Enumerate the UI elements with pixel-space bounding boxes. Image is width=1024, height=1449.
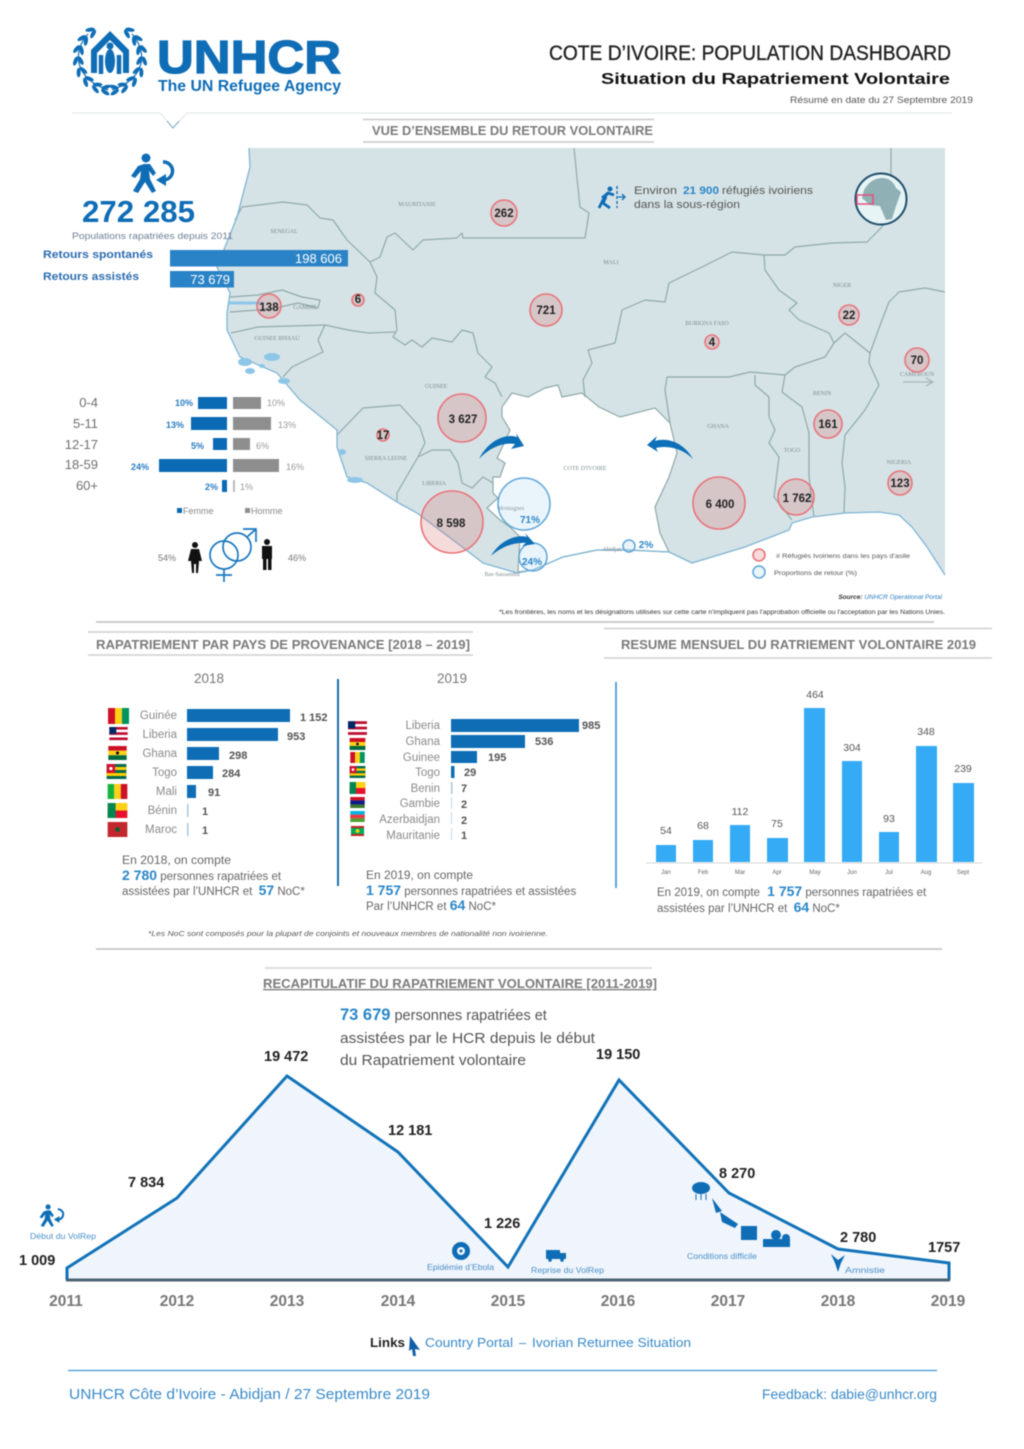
chart: returns by country 2019: Guinee (403, 752, 440, 764)
section heading: vue d'ensemble (363, 120, 654, 142)
bar: spontaneous returns (170, 250, 348, 266)
year labels: 2017 (711, 1293, 745, 1310)
text: cumulative assisted returns: 73 679 personnes rapatriées et (340, 1006, 547, 1024)
chart: age pyramid: 12-17 (65, 437, 98, 452)
text: 2018 summary (122, 855, 305, 898)
chart: returns by country 2018: Guinée (140, 710, 177, 722)
flags (107, 708, 129, 837)
country labels (254, 202, 935, 578)
chart: monthly returns 2019: Aug (921, 870, 931, 876)
text: monthly summary (657, 883, 927, 915)
panel: sex ratio: 54% (158, 553, 176, 563)
year label: 2018 (194, 671, 224, 686)
text: cumulative assisted returns: du Rapatriement volontaire (340, 1053, 526, 1069)
value labels: 1 226 (484, 1216, 520, 1232)
return proportion circles: 24% (522, 557, 542, 568)
value labels: 8 270 (719, 1166, 755, 1182)
bar: assisted returns (170, 271, 234, 288)
flags (348, 721, 367, 836)
returnee circles: 721 (536, 305, 556, 317)
chart: monthly returns 2019: Jan (661, 870, 671, 876)
chart: monthly returns 2019: Feb (698, 870, 709, 876)
chart: monthly returns 2019: Apr (772, 870, 782, 876)
icon: locator globe (856, 174, 906, 224)
map source: Source: UNHCR Operational Portal (838, 594, 943, 601)
text: monthly summary: assistées par l’UNHCR et 64 NoC* (657, 899, 840, 915)
country labels: GUINEE BISSAU (254, 336, 300, 342)
chart: returns by country 2018: Ghana (142, 748, 178, 760)
value labels (19, 1047, 960, 1269)
country labels: GHANA (707, 424, 729, 430)
chart: monthly returns 2019 (646, 689, 982, 876)
panel: total returns (43, 154, 348, 288)
label: assisted returns: Retours assistés (43, 271, 139, 283)
map legend (753, 549, 911, 578)
chart: returns by country 2019: 7 (461, 783, 467, 795)
text: cumulative assisted returns: assistées par le HCR depuis le début (340, 1031, 595, 1047)
title block (549, 42, 973, 105)
country labels: MAURITANIE (398, 202, 436, 208)
section heading: resume mensuel (604, 628, 992, 658)
legend: sex (177, 506, 283, 516)
value labels: 1 009 (19, 1253, 55, 1269)
footnote: NoC: *Les NoC sont composés pour la plupart de conjoints et nouveaux membres de nationalité non ivoirienne. (148, 929, 548, 938)
chart: age pyramid: 10% (175, 398, 193, 408)
returnee circles: 4 (709, 337, 716, 349)
returnee circles (257, 200, 929, 553)
icon: man (262, 539, 272, 570)
year labels: 2019 (931, 1293, 966, 1310)
section heading: recapitulatif: RECAPITULATIF DU RAPATRIEMENT VOLONTAIRE [2011-2019] (263, 976, 657, 991)
chart: returns by country 2018: Togo (152, 767, 177, 779)
date: Résumé en date du 27 Septembre 2019 (790, 95, 973, 105)
year labels: 2015 (491, 1293, 526, 1310)
chart: monthly returns 2019: 93 (883, 813, 895, 825)
chart: monthly returns 2019: 54 (660, 825, 672, 837)
chart: monthly returns 2019: Jun (847, 870, 857, 876)
links: Ivorian Returnee Situation (532, 1335, 691, 1350)
river Gambia (229, 302, 262, 304)
chart: returns by country 2018: 91 (208, 787, 220, 799)
chart: returns by country 2019: Togo (415, 767, 440, 779)
tagline: The UN Refugee Agency (158, 78, 341, 95)
chart: age pyramid: 5-11 (73, 416, 98, 431)
text: 2019 summary: 1 757 personnes rapatriées et assistées (366, 882, 576, 898)
returnee circles: 3 627 (449, 414, 477, 426)
arrow to Cameroun (903, 378, 933, 386)
panel: sex ratio: 46% (288, 553, 306, 563)
year labels: 2018 (821, 1293, 856, 1310)
annotation: difficult conditions (687, 1182, 790, 1261)
returnee circles: 8 598 (437, 518, 466, 530)
country labels: Montagnes (498, 506, 525, 512)
icon: gender symbols (210, 529, 256, 582)
year label: 2019 (437, 671, 467, 686)
chart: returns by country 2018: 1 152 (300, 712, 328, 724)
Cote d'Ivoire (487, 385, 677, 572)
chart: returns by country 2019: 985 (582, 720, 600, 732)
text: 2018 summary: assistées par l’UNHCR et 57 NoC* (122, 882, 305, 898)
icon: fleeing person (599, 186, 625, 208)
value labels: 19 150 (596, 1047, 640, 1063)
chart: monthly returns 2019: 68 (697, 820, 709, 832)
year labels: 2012 (160, 1293, 194, 1310)
chart: returns by country 2018: Bénin (148, 805, 177, 817)
chart: returns by country 2019: 2 (461, 815, 467, 827)
chart: returns by country 2018: 284 (222, 768, 241, 780)
text: cumulative assisted returns (340, 1006, 595, 1069)
annotation: resumption (531, 1250, 605, 1275)
chart: returns by country 2018: 953 (287, 731, 305, 743)
text: 2018 summary: 2 780 personnes rapatriées et (122, 867, 282, 883)
callout: refugees in the sub-region (599, 185, 814, 211)
chart: monthly returns 2019: 304 (843, 742, 861, 754)
chart: monthly returns 2019: 112 (732, 806, 749, 818)
chart: age pyramid: 6% (256, 441, 269, 451)
chart: monthly returns 2019: May (809, 870, 821, 876)
returnee circles: 17 (377, 430, 389, 442)
links: Links (370, 1335, 405, 1350)
land (217, 148, 945, 575)
chart: returns by country 2018: Maroc (145, 824, 177, 836)
annotation: start of VolRep (30, 1204, 97, 1241)
text: 2019 summary (366, 870, 576, 913)
footer: Feedback: dabie@unhcr.org (762, 1386, 937, 1402)
section heading: rapatriement par pays: RAPATRIEMENT PAR PAYS DE PROVENANCE [2018 – 2019] (96, 637, 470, 652)
year labels: 2011 (49, 1293, 83, 1310)
chart: returns by country 2019: 536 (535, 736, 553, 748)
chart: returns by country 2019 (348, 671, 600, 842)
annotation: Ebola: Epidémie d’Ebola (427, 1263, 495, 1272)
country labels: GUINEE (425, 384, 447, 390)
year labels: 2014 (381, 1293, 416, 1310)
icon: woman (188, 542, 202, 573)
links: – (519, 1335, 527, 1350)
chart: area chart 2011-2019 (19, 1047, 966, 1310)
chart: age pyramid: 13% (166, 420, 184, 430)
text: 2019 summary: Par l’UNHCR et 64 NoC* (366, 897, 496, 913)
annotation: amnesty: Amnistie (845, 1266, 886, 1275)
return proportion circles: 71% (520, 515, 540, 526)
value labels: 19 472 (264, 1049, 308, 1065)
country labels: CAMEROUN (900, 372, 935, 378)
chart: monthly returns 2019: 75 (771, 818, 783, 830)
bar: assisted returns: 73 679 (190, 272, 230, 287)
callout: refugees in the sub-region: réfugiés ivoiriens (722, 185, 814, 197)
label: spontaneous returns: Retours spontanés (43, 249, 153, 261)
chart: age pyramid: 1% (240, 482, 253, 492)
year labels (49, 1293, 966, 1310)
value labels: 1757 (928, 1240, 960, 1256)
subtitle: Situation du Rapatriement Volontaire (601, 71, 950, 88)
return proportion circles (498, 478, 653, 571)
chart: returns by country 2019: Gambie (400, 798, 440, 810)
country labels: BURKINA FASO (685, 321, 729, 327)
chart: returns by country 2019: Liberia (405, 720, 441, 732)
country labels: GAMBIE (293, 305, 317, 311)
returnee circles: 161 (818, 419, 838, 431)
chart: monthly returns 2019: Sept (957, 870, 970, 876)
country labels: Bas-Sassandra (484, 572, 520, 578)
callout: refugees in the sub-region: 21 900 (683, 185, 719, 197)
islands (238, 353, 363, 483)
returnee circles: 70 (911, 355, 923, 367)
callout: refugees in the sub-region: Environ (634, 185, 677, 197)
section heading: vue d'ensemble: VUE D’ENSEMBLE DU RETOUR VOLONTAIRE (372, 123, 653, 138)
returnee circles: 1 762 (783, 493, 811, 505)
UNHCR wordmark: UNHCR (157, 31, 341, 83)
map legend: Proportions de retour (%) (774, 571, 857, 577)
chart: age pyramid: 0-4 (79, 395, 98, 410)
icon: UNHCR emblem (71, 24, 149, 97)
chart: monthly returns 2019: 239 (954, 763, 972, 775)
returnee circles: 6 (355, 294, 361, 306)
returnee circles: 22 (843, 310, 855, 322)
country labels: COTE D'IVOIRE (564, 466, 607, 472)
chart: returns by country 2019: Azerbaidjan (379, 814, 440, 826)
map legend: # Réfugiés Ivoiriens dans les pays d'asile (776, 554, 911, 560)
country labels: NIGER (833, 283, 851, 289)
chart: returns by country 2019: 2 (461, 799, 467, 811)
chart: returns by country 2018: 1 (202, 806, 208, 818)
links: Country Portal (425, 1335, 513, 1350)
annotation: amnesty (831, 1254, 886, 1275)
chart: returns by country 2019: 1 (461, 830, 467, 842)
text: monthly summary: En 2019, on compte 1 757 personnes rapatriées et (657, 883, 927, 899)
year labels: 2013 (270, 1293, 305, 1310)
country labels: MALI (603, 260, 619, 266)
chart: returns by country 2018: 298 (229, 750, 247, 762)
chart: monthly returns 2019: 348 (917, 726, 935, 738)
chart: age pyramid: 16% (286, 462, 304, 472)
icon: cursor (409, 1336, 420, 1356)
chart: returns by country 2019: 195 (488, 752, 506, 764)
chart: monthly returns 2019: Jul (885, 870, 893, 876)
key figure caption: Populations rapatriées depuis 2011 (72, 231, 233, 242)
annotation: resumption: Reprise du VolRep (531, 1266, 605, 1275)
section heading: resume mensuel: RESUME MENSUEL DU RATRIEMENT VOLONTAIRE 2019 (621, 637, 976, 652)
callout: refugees in the sub-region: dans la sous-région (634, 199, 740, 211)
annotation: start of VolRep: Début du VolRep (30, 1232, 97, 1241)
year labels: 2016 (601, 1293, 636, 1310)
chart: age pyramid: 10% (267, 398, 285, 408)
axis (66, 1278, 950, 1282)
icon: returnee (131, 154, 173, 193)
chart: returns by country 2019: Mauritanie (386, 830, 440, 842)
value labels: 2 780 (840, 1230, 876, 1246)
chart: age pyramid: 60+ (76, 478, 98, 493)
links (370, 1335, 691, 1356)
country labels: SIERRA LEONE (365, 456, 407, 462)
country labels: LIBERIA (422, 481, 446, 487)
country labels: Abidjan (602, 547, 622, 553)
value labels: 12 181 (388, 1123, 432, 1139)
title: COTE D’IVOIRE: POPULATION DASHBOARD (549, 42, 951, 65)
chart: returns by country 2018: Mali (156, 786, 177, 798)
text: 2019 summary: En 2019, on compte (366, 870, 473, 882)
chart: returns by country 2018: Liberia (142, 729, 178, 741)
legend: sex: Homme (251, 506, 283, 516)
coastline (217, 148, 945, 575)
chart: returns by country 2019: Benin (411, 783, 440, 795)
annotation: difficult conditions: Conditions difficile (687, 1252, 758, 1261)
chart: age pyramid: 5% (191, 441, 204, 451)
returnee circles: 123 (890, 478, 910, 490)
chart: age pyramid (65, 395, 304, 516)
chart: age pyramid: 13% (278, 420, 296, 430)
map disclaimer: *Les frontières, les noms et les désignations utilisées sur cette carte n'impliquent pas l'approbation officielle ou l'acceptation par les Nations Unies. (499, 609, 945, 616)
value labels: 7 834 (128, 1175, 164, 1191)
footer: UNHCR Côte d’Ivoire - Abidjan / 27 Septembre 2019 (69, 1386, 430, 1403)
returnee circles: 138 (259, 302, 279, 314)
text: 2018 summary: En 2018, on compte (122, 855, 231, 867)
chart: returns by country 2018: 1 (202, 825, 208, 837)
annotation: Ebola (427, 1242, 495, 1272)
map: West Africa (217, 148, 945, 578)
chart: returns by country 2018 (107, 671, 328, 837)
arrows of return (479, 433, 693, 556)
legend: sex: Femme (183, 506, 214, 516)
return proportion circles: 2% (639, 540, 653, 551)
area (67, 1076, 949, 1280)
country labels: NIGERIA (887, 460, 912, 466)
footer (69, 1386, 937, 1403)
country labels: SENEGAL (270, 229, 298, 235)
returnee circles: 262 (494, 208, 514, 220)
section heading: rapatriement par pays (88, 632, 473, 655)
logo: UNHCR (71, 24, 341, 97)
chart: age pyramid: 18-59 (65, 457, 98, 472)
chart: monthly returns 2019: Mar (735, 870, 745, 876)
chart: age pyramid: 2% (205, 482, 218, 492)
chart: returns by country 2019: 29 (464, 767, 476, 779)
returnee circles: 6 400 (706, 499, 734, 511)
bar: spontaneous returns: 198 606 (295, 251, 342, 266)
chart: returns by country 2019: Ghana (405, 736, 441, 748)
key figure: 272 285 (82, 194, 195, 229)
country labels: TOGO (784, 448, 801, 454)
chart: monthly returns 2019: 464 (806, 689, 824, 701)
panel: sex ratio (158, 529, 306, 582)
chart: age pyramid: 24% (131, 462, 149, 472)
country labels: BENIN (813, 391, 832, 397)
line (67, 1076, 949, 1280)
